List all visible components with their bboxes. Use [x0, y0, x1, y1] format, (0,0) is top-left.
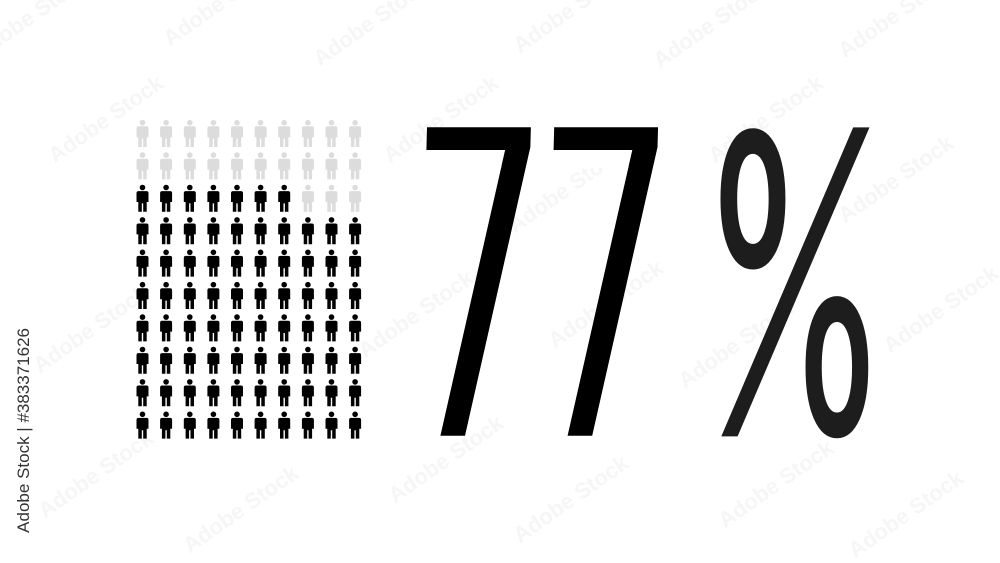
watermarks: Adobe Stock — [353, 265, 479, 363]
gray people: 23 — [136, 120, 361, 212]
stock id side label: Adobe Stock | #383371626 — [14, 328, 33, 533]
big number 77: 77 — [400, 46, 678, 533]
black people: 77 — [136, 185, 361, 439]
watermarks: Adobe Stock — [703, 70, 829, 168]
watermarks: Adobe Stock — [543, 255, 669, 353]
watermarks: Adobe Stock — [843, 465, 969, 563]
watermarks: Adobe Stock — [33, 425, 159, 523]
percent sign — [720, 127, 870, 438]
watermarks: Adobe Stock — [878, 260, 1000, 358]
percent sign: % — [706, 110, 877, 514]
watermarks: Adobe Stock — [378, 70, 504, 168]
watermarks: Adobe Stock — [43, 70, 169, 168]
watermarks: Adobe Stock — [833, 130, 959, 228]
percent sign: % — [711, 68, 888, 469]
people pictogram grid: 77 of 100 — [136, 120, 361, 439]
watermarks: Adobe Stock — [178, 460, 304, 558]
watermarks: Adobe Stock — [713, 435, 839, 533]
watermarks: Adobe Stock — [503, 140, 629, 238]
watermarks: Adobe Stock — [508, 450, 634, 548]
watermarks: Adobe Stock — [383, 410, 509, 508]
watermarks: Adobe Stock — [673, 295, 799, 393]
percent sign: % — [672, 57, 916, 524]
watermarks: Adobe Stock — [28, 280, 154, 378]
